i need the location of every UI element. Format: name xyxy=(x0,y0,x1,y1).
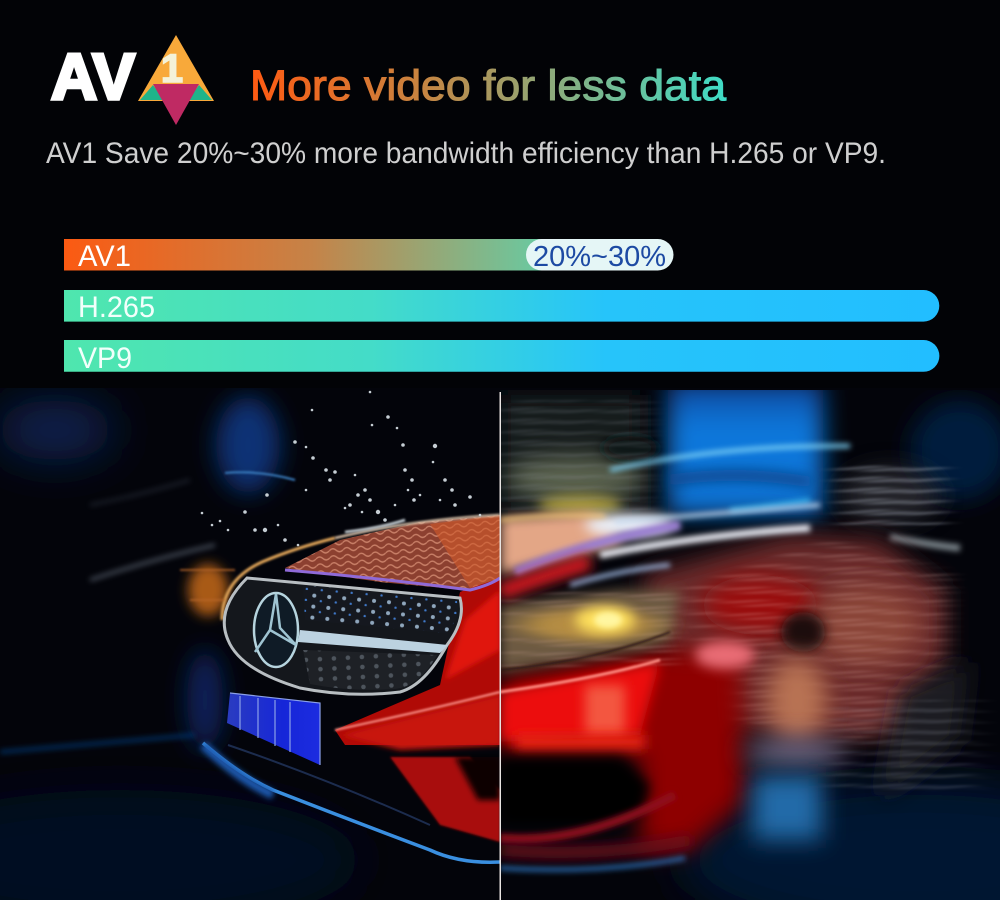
maroon car rear body xyxy=(640,535,945,740)
title: More video for less data xyxy=(250,62,726,110)
main red body xyxy=(500,650,745,850)
black air intake xyxy=(500,758,650,825)
lower grille dots xyxy=(303,650,437,690)
hood with water texture xyxy=(285,515,500,590)
bar: VP9: VP9 xyxy=(78,342,132,375)
water splash xyxy=(201,391,481,546)
grille surround xyxy=(224,578,461,694)
orange glow xyxy=(188,564,228,616)
front lip xyxy=(203,743,500,862)
wheel and blue reflection xyxy=(781,612,825,652)
logo triangle xyxy=(138,35,214,125)
bar chart: bandwidth comparison xyxy=(64,239,939,375)
logo triangle: 1 xyxy=(161,47,183,91)
red body xyxy=(335,575,500,745)
upper grille dots xyxy=(303,585,458,633)
left half: sharp car front xyxy=(180,391,500,862)
licence plate xyxy=(227,693,320,765)
star emblem xyxy=(254,593,298,667)
divider line xyxy=(500,392,501,900)
bar: VP9 xyxy=(64,340,939,375)
bar: H.265: H.265 xyxy=(78,291,155,324)
car comparison photo xyxy=(0,380,1000,900)
bar: AV1 xyxy=(64,239,674,273)
background: night street lights xyxy=(0,397,1000,900)
bar: H.265 xyxy=(64,290,939,324)
AV1 logo xyxy=(51,35,214,125)
grey streaks xyxy=(840,467,940,523)
headlight xyxy=(500,590,680,672)
callout pill: 20%~30%: 20%~30% xyxy=(533,241,666,273)
chrome bar xyxy=(298,630,448,653)
subtitle: AV1 Save 20%~30% more bandwidth efficiency than H.265 or VP9. xyxy=(46,137,886,170)
logo wordmark AV: AV xyxy=(51,40,135,113)
bar: AV1: AV1 xyxy=(78,240,131,273)
hood streaks xyxy=(500,512,620,575)
right half: compressed blurred car xyxy=(500,380,1000,870)
blue background glow xyxy=(668,380,823,515)
